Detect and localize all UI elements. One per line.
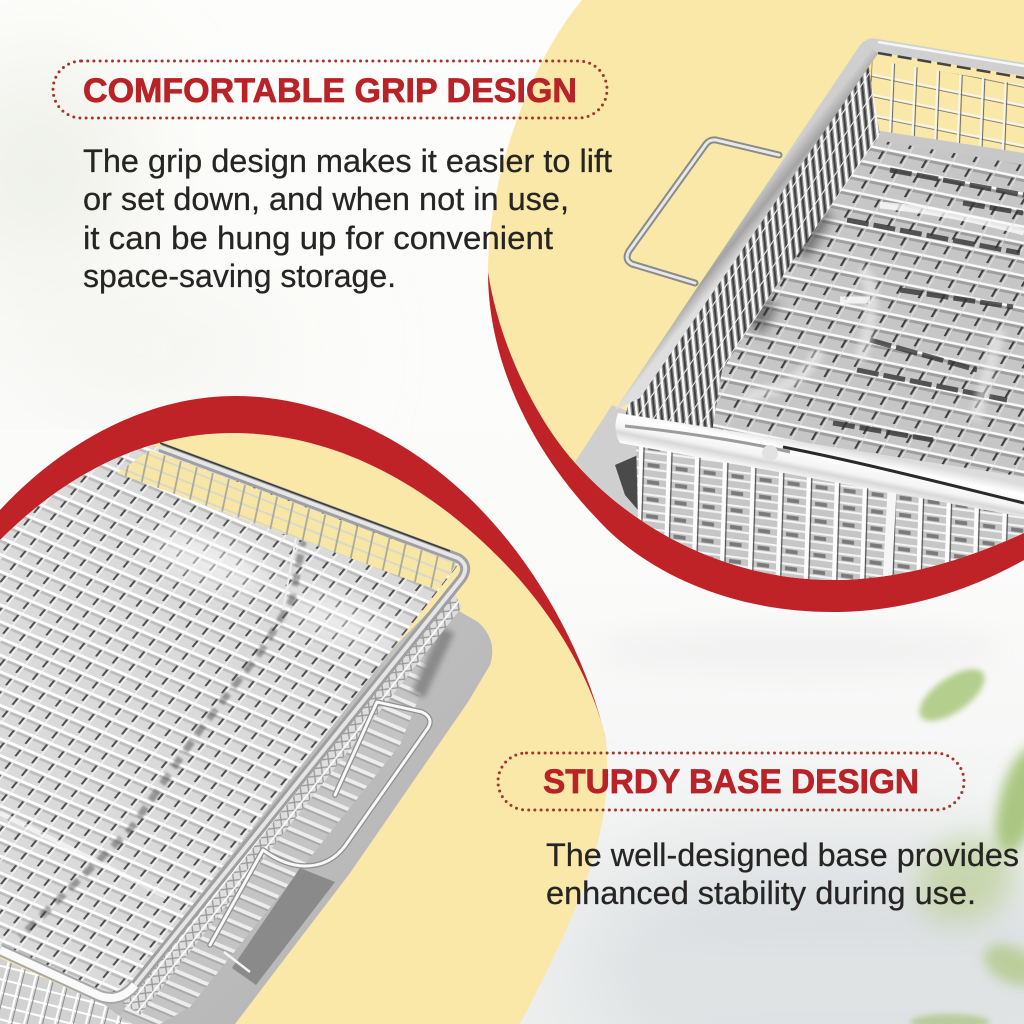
tray edge visible through mesh — [876, 130, 1024, 165]
rim joint — [762, 445, 778, 461]
floor reflections — [0, 515, 403, 937]
callout: comfortable grip design — [53, 61, 607, 118]
tray under basket — [90, 600, 492, 1024]
text block: grip description: The grip design makes it easier to lift — [83, 143, 612, 179]
heading: STURDY BASE DESIGN — [543, 763, 919, 801]
floor shadows and highlights — [745, 170, 1024, 440]
basket back wall mesh — [117, 450, 457, 590]
basket side mesh band — [118, 590, 462, 1015]
text block: base description: The well-designed base provides — [546, 837, 1019, 873]
text block: grip description: space-saving storage. — [83, 258, 396, 294]
rim: front — [615, 413, 1024, 517]
dotted capsule — [53, 61, 607, 118]
text block: grip description — [83, 143, 612, 294]
background leaves — [903, 659, 1024, 1024]
tray ribs — [115, 640, 430, 1024]
red crescent: bottom left — [0, 396, 606, 740]
basket side wall mesh — [625, 50, 880, 432]
rim: back — [866, 38, 1024, 78]
text block: base description: enhanced stability during use. — [546, 875, 976, 911]
dotted capsule — [498, 753, 964, 810]
tray corner highlight — [224, 952, 250, 972]
basket back wall mesh — [871, 61, 1024, 150]
text block: grip description: it can be hung up for convenient — [83, 220, 553, 256]
tray shadow — [615, 455, 638, 510]
callout: sturdy base design — [498, 753, 964, 810]
red crescent: top right — [488, 272, 1024, 612]
rim: left — [615, 40, 879, 410]
front wall post — [887, 490, 892, 585]
rim — [0, 443, 465, 998]
basket floor mesh — [700, 138, 1024, 495]
tray dark side band — [232, 868, 335, 985]
panel: bottom left yellow circle — [0, 433, 607, 1024]
handle — [210, 702, 430, 945]
product photo: bottom left basket — [0, 443, 492, 1024]
handle: top right basket — [627, 140, 779, 283]
tray inner groove — [418, 630, 448, 695]
heading: COMFORTABLE GRIP DESIGN — [83, 72, 577, 110]
product photo: top right basket — [575, 38, 1024, 600]
text block: grip description: or set down, and when not in use, — [83, 181, 569, 217]
text block: base description — [546, 837, 1019, 911]
basket floor mesh — [0, 445, 462, 1000]
panel: top right yellow circle — [488, 0, 1024, 580]
tray corner beneath basket — [575, 405, 700, 560]
basket front wall mesh — [636, 446, 1024, 580]
basket front wall mesh — [0, 958, 130, 1024]
